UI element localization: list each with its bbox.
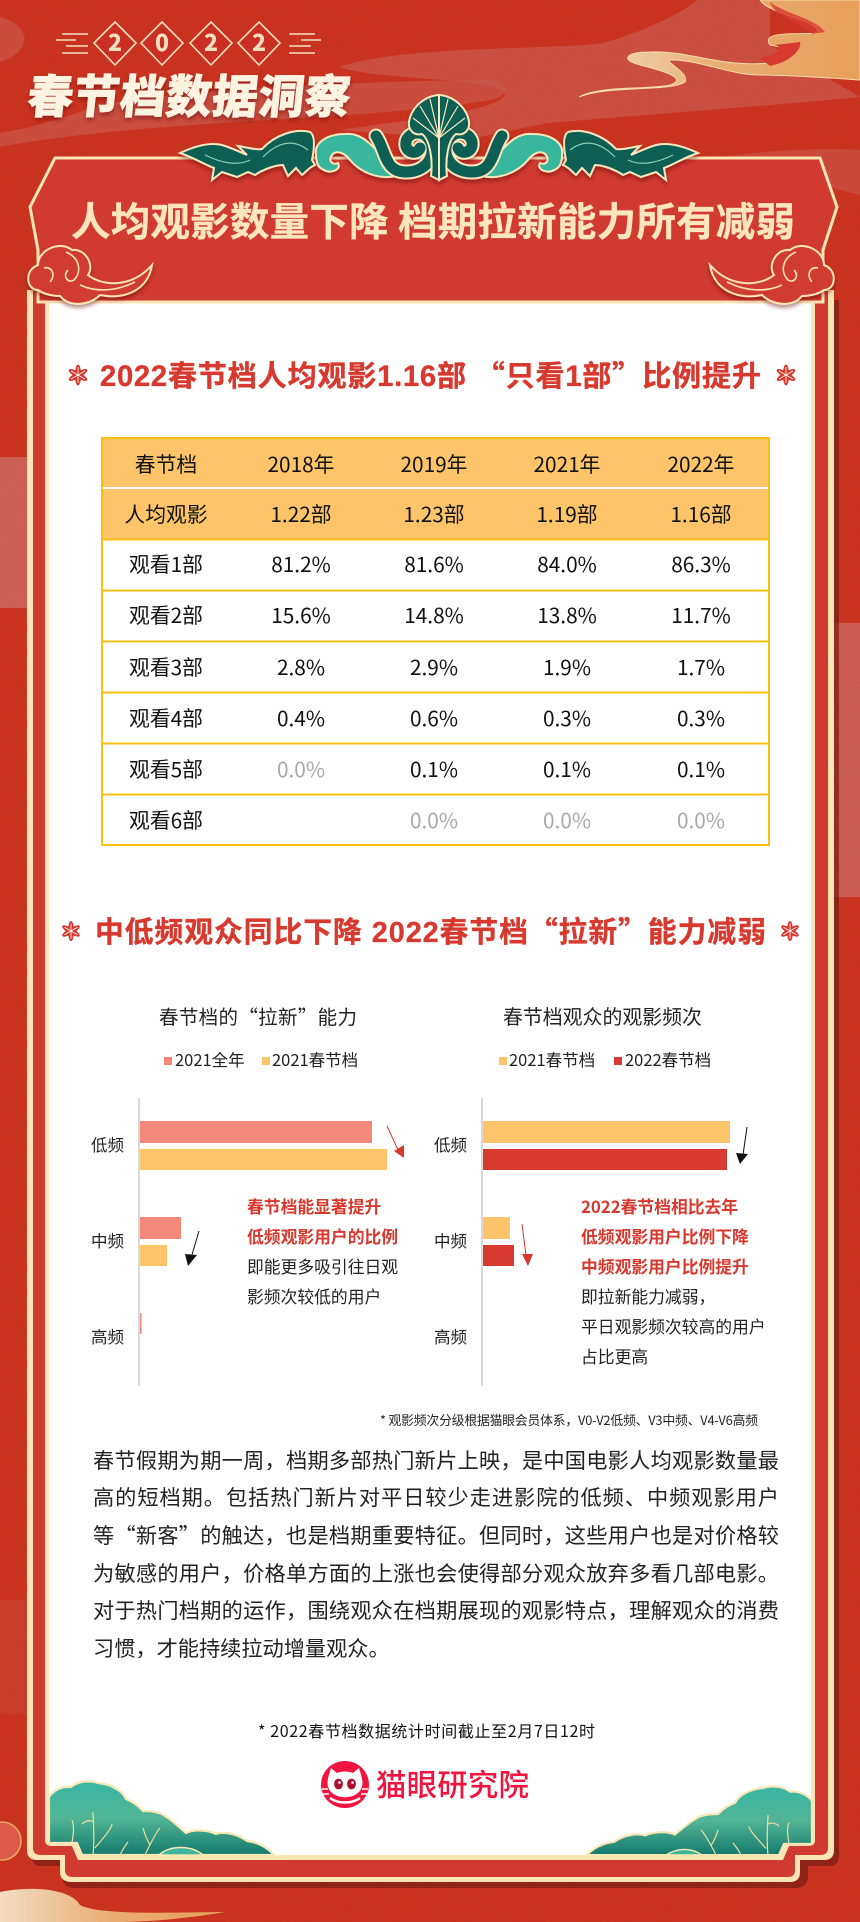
arrow: red down — [522, 1224, 533, 1266]
heading text: 2022春节档人均观影1.16部 “只看1部”比例提升 — [100, 353, 761, 395]
table header row — [135, 448, 734, 478]
arrow: black down — [185, 1231, 199, 1266]
category labels — [91, 1132, 124, 1348]
row: 4 films: 0.6% — [410, 702, 458, 732]
annotation: 低频观影用户比例下降 — [581, 1224, 749, 1248]
row: 1 film: 84.0% — [537, 548, 597, 578]
table header row: 2021年 — [534, 448, 600, 478]
label: 2022 year badge: 2 — [108, 24, 122, 58]
annotation: 春节档能显著提升 — [247, 1194, 381, 1218]
legend: 2021春节档 — [272, 1047, 358, 1071]
row: 3 films: 1.7% — [677, 651, 725, 681]
row: 4 films: 0.4% — [277, 702, 325, 732]
chart: viewing frequency — [434, 1001, 766, 1386]
axis — [481, 1098, 483, 1386]
heading text: 中低频观众同比下降 2022春节档“拉新”能力减弱 — [95, 910, 766, 951]
row: 5 films: 0.1% — [677, 753, 725, 783]
bars — [140, 1121, 387, 1334]
annotation: 即能更多吸引往日观 — [247, 1254, 398, 1278]
banner title: 人均观影数量下降 档期拉新能力所有减弱 — [71, 191, 795, 248]
row: 4 films — [129, 702, 725, 732]
arrow: red down — [387, 1126, 404, 1158]
annotation: 中频观影用户比例提升 — [581, 1254, 749, 1278]
annotation: 低频观影用户的比例 — [247, 1224, 398, 1248]
row: 3 films — [129, 651, 725, 681]
body paragraph: 为敏感的用户，价格单方面的上涨也会使得部分观众放弃多看几部电影。 — [93, 1557, 779, 1588]
annotation — [247, 1194, 398, 1308]
row: 2 films: 15.6% — [271, 599, 331, 629]
row: 1 film — [129, 548, 731, 578]
row: 3 films: 1.9% — [543, 651, 591, 681]
label: 2022 year badge — [56, 22, 321, 65]
row: per-capita — [124, 498, 732, 528]
row: 6 films: 0.0% — [543, 804, 591, 834]
row: 1 film: 86.3% — [671, 548, 731, 578]
flower icon left — [67, 364, 89, 386]
annotation: 2022春节档相比去年 — [581, 1194, 738, 1218]
chart title: 春节档的“拉新”能力 — [159, 1001, 357, 1030]
row: 2 films: 11.7% — [671, 599, 731, 629]
row: 4 films: 观看4部 — [129, 702, 203, 732]
legend: 2021全年 — [175, 1047, 245, 1071]
category labels: 中频 — [91, 1228, 124, 1252]
gold ribbon: top right — [579, 0, 860, 97]
trees: right — [587, 1787, 812, 1855]
body paragraph: 春节假期为期一周，档期多部热门新片上映，是中国电影人均观影数量最 — [93, 1444, 779, 1475]
row: 5 films: 0.1% — [543, 753, 591, 783]
row: 5 films — [129, 753, 725, 783]
body paragraph: 对于热门档期的运作，围绕观众在档期展现的观影特点，理解观众的消费 — [93, 1594, 779, 1625]
arrow: black down — [736, 1127, 748, 1164]
main frame — [27, 290, 839, 1888]
body paragraph: 等“新客”的触达，也是档期重要特征。但同时，这些用户也是对价格较 — [93, 1519, 779, 1550]
icon: cat head — [321, 1761, 369, 1808]
row: 6 films: 0.0% — [677, 804, 725, 834]
footnote: data cut-off: * 2022春节档数据统计时间截止至2月7日12时 — [258, 1718, 595, 1742]
gold ribbon: bottom left — [0, 1822, 225, 1922]
row: per-capita: 1.23部 — [403, 498, 465, 528]
row: 6 films: 0.0% — [410, 804, 458, 834]
table header row: 2022年 — [668, 448, 734, 478]
body paragraph: 高的短档期。包括热门新片对平日较少走进影院的低频、中频观影用户 — [93, 1481, 779, 1512]
category labels: 高频 — [91, 1324, 124, 1348]
category labels: 低频 — [434, 1132, 467, 1156]
row: 2 films: 14.8% — [404, 599, 464, 629]
cloud: left corner — [28, 246, 152, 304]
row: 1 film: 81.6% — [404, 548, 464, 578]
flower icon right — [780, 921, 800, 941]
row: 3 films: 观看3部 — [129, 651, 203, 681]
flower icon left — [61, 921, 81, 941]
logo wordmark: 猫眼研究院 — [376, 1761, 529, 1805]
axis — [138, 1098, 140, 1386]
row: 6 films: 观看6部 — [129, 804, 203, 834]
chart: new-audience ability — [91, 1001, 404, 1386]
row: 2 films: 13.8% — [537, 599, 597, 629]
row: per-capita: 人均观影 — [124, 498, 208, 528]
left half of the crest — [180, 95, 439, 180]
row: 1 film: 81.2% — [271, 548, 331, 578]
right half of the crest — [439, 95, 698, 180]
label: 2022 year badge: 2 — [252, 24, 266, 58]
table header row: 2018年 — [268, 448, 334, 478]
row: 6 films — [129, 804, 725, 834]
legend — [164, 1047, 358, 1071]
category labels: 高频 — [434, 1324, 467, 1348]
row: per-capita: 1.19部 — [536, 498, 598, 528]
heading: new-audience ability — [61, 910, 800, 951]
annotation — [581, 1194, 766, 1368]
header banner — [30, 158, 837, 302]
table header row: 2019年 — [401, 448, 467, 478]
flower icon right — [775, 364, 797, 386]
footnote: frequency tiers: * 观影频次分级根据猫眼会员体系，V0-V2低频、V3中频、V4-V6高频 — [380, 1410, 758, 1429]
legend — [499, 1047, 711, 1071]
body paragraph: 习惯，才能持续拉动增量观众。 — [93, 1632, 390, 1663]
annotation: 占比更高 — [581, 1344, 648, 1368]
body paragraph — [93, 1444, 779, 1663]
legend: 2022春节档 — [625, 1047, 711, 1071]
row: per-capita: 1.22部 — [270, 498, 332, 528]
data table — [102, 438, 769, 845]
bars — [483, 1121, 730, 1266]
logo — [321, 1761, 529, 1808]
row: 5 films: 0.1% — [410, 753, 458, 783]
row: per-capita: 1.16部 — [670, 498, 732, 528]
row: 5 films: 0.0% — [277, 753, 325, 783]
table fills and rules — [102, 438, 769, 845]
ornament: green scroll crest — [180, 95, 698, 180]
row: 5 films: 观看5部 — [129, 753, 203, 783]
row: 2 films: 观看2部 — [129, 599, 203, 629]
category labels — [434, 1132, 467, 1348]
row: 2 films — [129, 599, 731, 629]
row: 4 films: 0.3% — [677, 702, 725, 732]
table header row: 春节档 — [135, 448, 197, 478]
trees: left — [49, 1781, 274, 1855]
row: 4 films: 0.3% — [543, 702, 591, 732]
label: 2022 year badge: 0 — [155, 24, 169, 58]
cloud: right corner — [710, 246, 834, 304]
page title: 春节档数据洞察 — [25, 61, 354, 127]
category labels: 中频 — [434, 1228, 467, 1252]
category labels: 低频 — [91, 1132, 124, 1156]
heading: per-capita viewing — [67, 353, 797, 395]
label: 2022 year badge: 2 — [204, 24, 218, 58]
chart title: 春节档观众的观影频次 — [503, 1001, 702, 1030]
legend: 2021春节档 — [509, 1047, 595, 1071]
annotation: 即拉新能力减弱， — [581, 1284, 715, 1308]
row: 3 films: 2.9% — [410, 651, 458, 681]
row: 3 films: 2.8% — [277, 651, 325, 681]
annotation: 影频次较低的用户 — [247, 1284, 381, 1308]
row: 1 film: 观看1部 — [129, 548, 203, 578]
annotation: 平日观影频次较高的用户 — [581, 1314, 766, 1338]
